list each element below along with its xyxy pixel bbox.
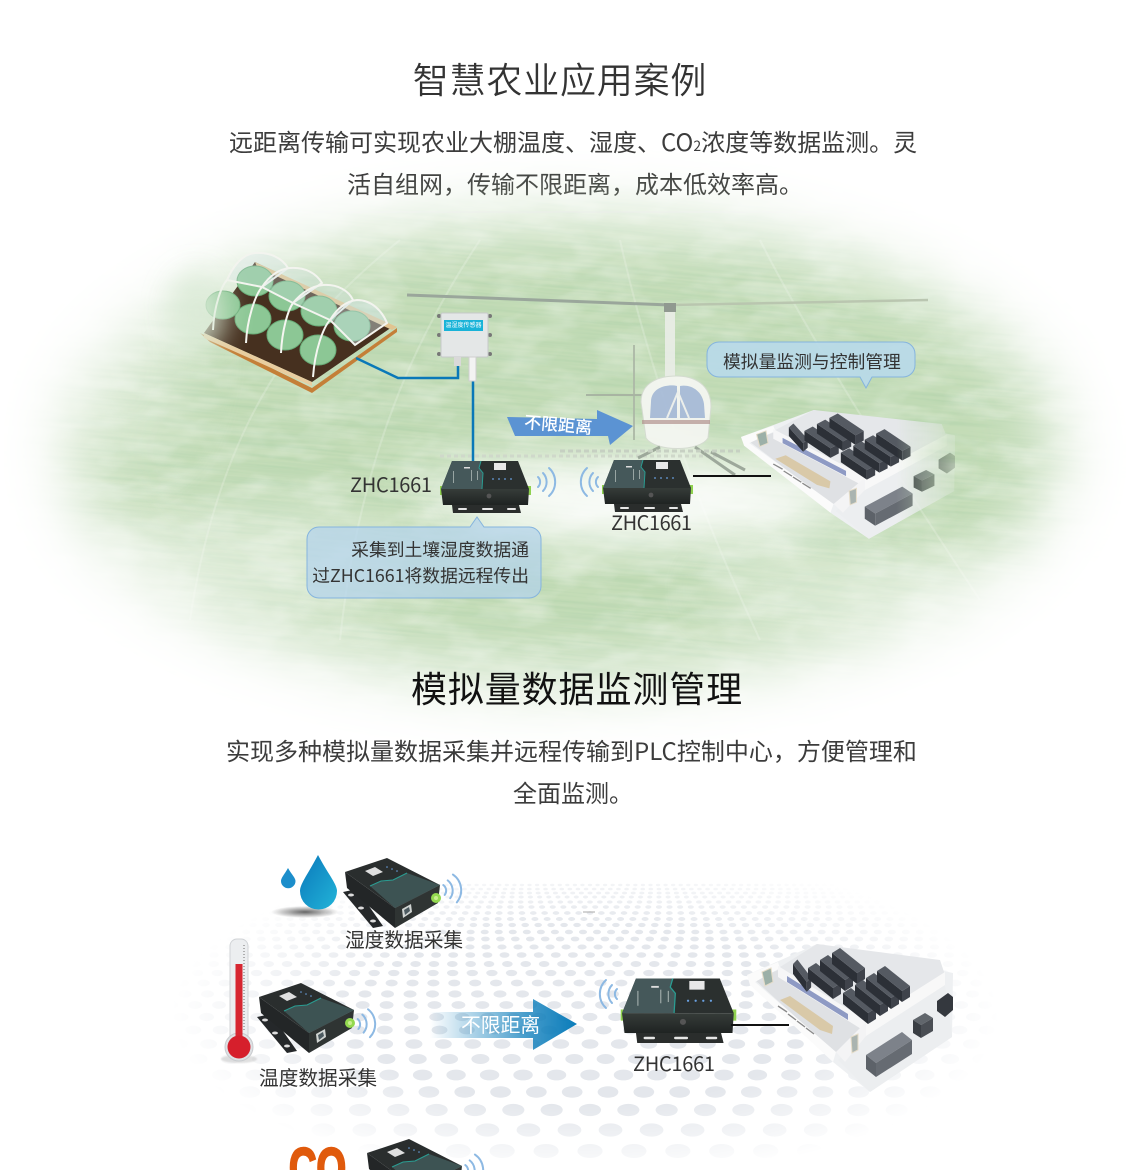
helicopter	[407, 295, 928, 475]
arrow: unlimited distance: 不限距离	[523, 408, 593, 439]
cabbages	[206, 266, 370, 365]
icon: water drops	[271, 855, 339, 918]
wifi: temperature collector	[357, 1009, 376, 1038]
device: ZHC1661 left	[440, 461, 531, 513]
sensor box	[437, 313, 492, 381]
callout: soil data: 过ZHC1661将数据远程传出	[312, 562, 529, 588]
intro text: smart agriculture: 远距离传输可实现农业大棚温度、湿度、CO2浓度等数据监测。灵	[229, 123, 917, 158]
wifi: humidity collector	[442, 874, 463, 904]
label: ZHC1661 left: ZHC1661	[350, 469, 432, 498]
background: perspective dot grid	[228, 884, 926, 1156]
arrow: unlimited distance	[507, 408, 633, 445]
label: humidity collection: 湿度数据采集	[345, 924, 463, 953]
intro text: smart agriculture: 活自组网，传输不限距离，成本低效率高。	[347, 165, 803, 200]
device: temperature collector	[257, 983, 355, 1053]
device: receiver ZHC1661	[621, 978, 736, 1043]
device: CO2 collector	[365, 1139, 463, 1170]
intro text: analog data monitoring: 全面监测。	[513, 774, 633, 809]
intro text: analog data monitoring	[226, 732, 917, 809]
control room bottom	[747, 944, 953, 1092]
glass arches	[227, 253, 387, 345]
cable: greenhouse to sensor	[356, 358, 458, 378]
arrow: unlimited distance	[430, 999, 577, 1050]
label: ZHC1661 right: ZHC1661	[611, 507, 692, 536]
label: ZHC1661 receiver: ZHC1661	[633, 1048, 715, 1077]
sensor box: 温湿度传感器	[445, 320, 482, 329]
wifi signal right device	[581, 468, 598, 496]
wifi: receiver	[600, 980, 617, 1008]
control room top	[741, 410, 955, 539]
callout: control management	[707, 342, 915, 388]
wifi: CO2 collector	[464, 1154, 485, 1170]
label: temperature collection: 温度数据采集	[259, 1062, 377, 1091]
title: smart agriculture: 智慧农业应用案例	[413, 52, 707, 104]
callout: soil data: 采集到土壤湿度数据通	[351, 536, 529, 562]
cable: device to control room	[693, 475, 771, 477]
background: farm field photo	[40, 173, 1090, 718]
greenhouse with cabbages	[169, 253, 397, 393]
wifi signal left device	[538, 468, 555, 496]
arrow: unlimited distance: 不限距离	[461, 1009, 540, 1038]
callout: soil data	[307, 517, 541, 598]
title: analog data monitoring: 模拟量数据监测管理	[411, 661, 743, 713]
cable: sensor to ZHC1661	[472, 378, 474, 462]
intro text: smart agriculture	[229, 123, 917, 200]
device: humidity collector	[343, 858, 441, 928]
intro text: analog data monitoring: 实现多种模拟量数据采集并远程传输到PLC控制中心，方便管理和	[226, 732, 917, 767]
icon: thermometer	[221, 939, 257, 1063]
device: ZHC1661 right	[602, 460, 693, 512]
callout: control management: 模拟量监测与控制管理	[723, 348, 901, 374]
cable: receiver to control room	[731, 1024, 789, 1026]
